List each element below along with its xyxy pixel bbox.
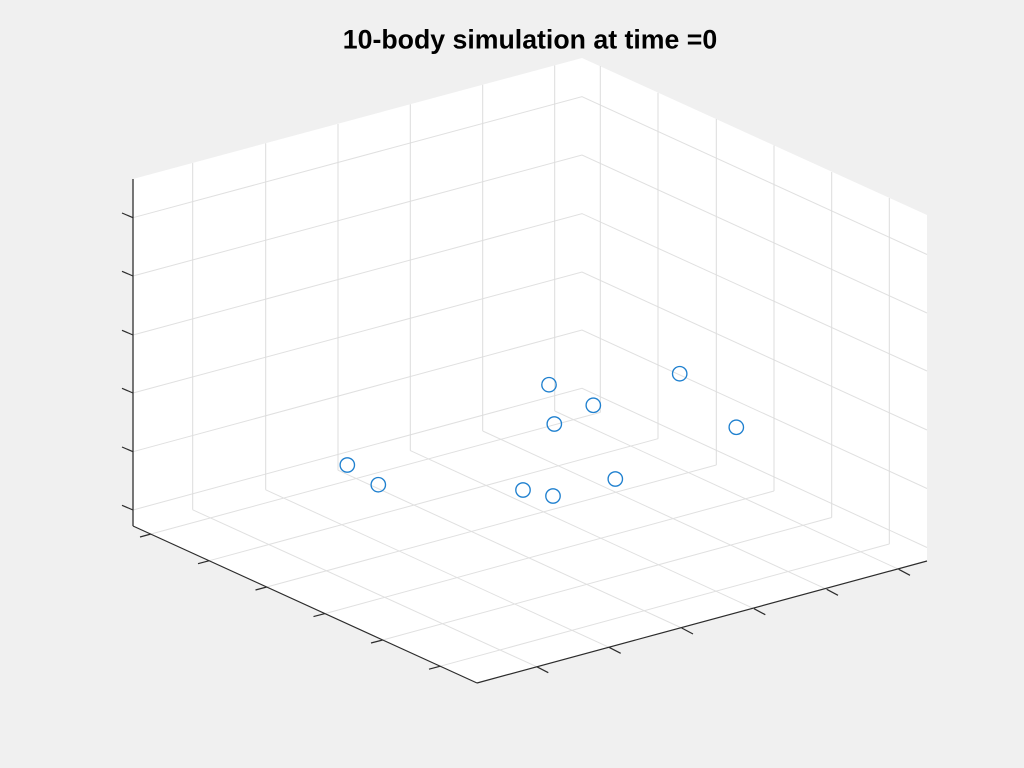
axes bbox=[122, 179, 927, 683]
floor grid lines running to the right wall bbox=[151, 412, 889, 666]
right floor axis with ticks bbox=[477, 561, 927, 683]
scatter markers: 10 bodies bbox=[340, 366, 744, 503]
grid lines bbox=[133, 66, 927, 667]
vertical grid lines on the left wall bbox=[193, 66, 555, 510]
floor grid lines running from the left wall bbox=[193, 411, 899, 667]
title: 10-body simulation at time =0 bbox=[343, 24, 717, 54]
z axis with ticks bbox=[122, 179, 133, 526]
vertical grid lines on the right wall bbox=[600, 66, 889, 544]
z grid lines on the walls bbox=[133, 97, 927, 547]
plot box: white axes walls and floor bbox=[133, 58, 927, 683]
left floor axis with ticks bbox=[133, 526, 477, 683]
